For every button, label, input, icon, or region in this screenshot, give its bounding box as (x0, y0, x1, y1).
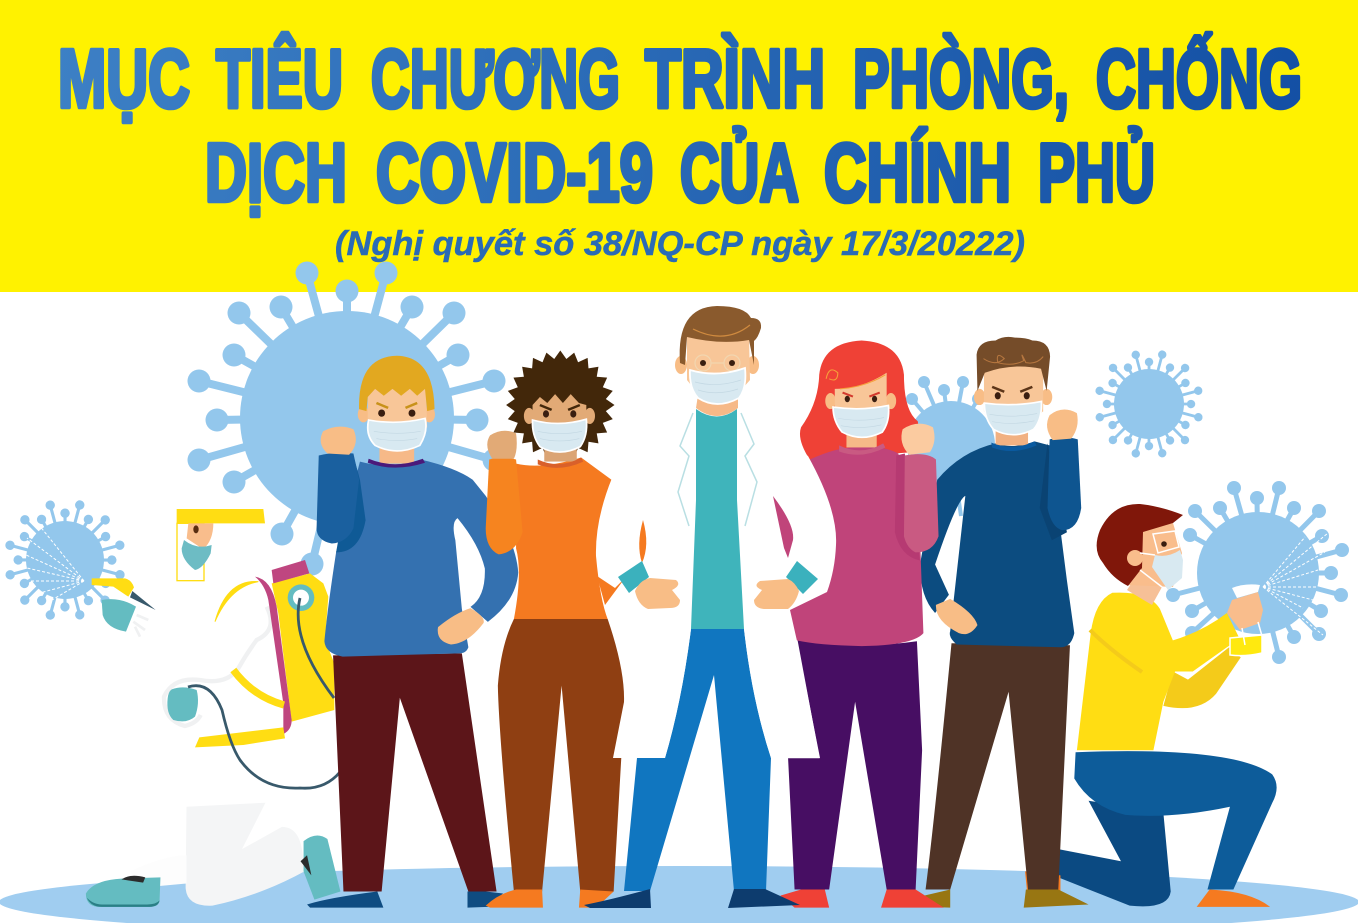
title: PHỦ (1038, 126, 1155, 219)
eye (1161, 541, 1167, 547)
front leg (1074, 751, 1277, 890)
title: CỦA (680, 126, 799, 219)
right cuff (786, 561, 818, 594)
front shoe (304, 835, 340, 900)
face (1128, 523, 1182, 587)
fist (487, 431, 517, 459)
orange sleeve sliver (639, 520, 646, 563)
person: woman in orange (486, 351, 625, 908)
right hand (754, 579, 799, 609)
backpack cap (272, 560, 309, 583)
neck (379, 445, 414, 464)
mask (984, 401, 1042, 435)
title: TIÊU (216, 32, 343, 125)
neck and collar (696, 395, 738, 416)
trousers (788, 640, 922, 890)
ear (1127, 550, 1143, 566)
small virus top right (1081, 336, 1217, 472)
person: kneeling sprayer in white suit (86, 509, 340, 907)
collar (991, 441, 1037, 451)
mask pleats (538, 431, 582, 441)
face (984, 364, 1043, 427)
title: COVID-19 (376, 126, 653, 219)
subtitle: (Nghị quyết số 38/NQ-CP ngày 17/3/20222) (335, 225, 1025, 263)
doctor mask pleats (695, 380, 741, 393)
back leg (1058, 801, 1171, 906)
raised arm (904, 454, 939, 552)
eyes (700, 360, 706, 366)
brows (992, 387, 1032, 392)
eyes (845, 396, 850, 402)
mask (1152, 550, 1183, 590)
yellow belt (195, 727, 285, 747)
ears (825, 393, 836, 409)
sweater (324, 460, 518, 657)
face (687, 335, 750, 400)
virus right with spray (1166, 481, 1349, 664)
visor (177, 509, 265, 523)
orange arm (597, 576, 625, 605)
arm shade (1040, 443, 1067, 540)
shirt (691, 409, 744, 629)
hand (1227, 592, 1263, 630)
doctor mask (690, 368, 745, 404)
mask (368, 418, 426, 451)
left hand (635, 578, 680, 609)
shoes (780, 890, 944, 908)
front shoe wedge (301, 855, 311, 875)
sweater crease (1090, 630, 1142, 672)
raised arm (1047, 437, 1081, 530)
face (533, 394, 586, 443)
lab coat left (596, 410, 691, 758)
spray gun (92, 578, 134, 597)
spray glove (102, 599, 136, 632)
raised arm (486, 458, 523, 554)
glasses (695, 355, 740, 371)
shoes (916, 890, 1089, 908)
eyes (378, 409, 385, 417)
title: DỊCH (205, 126, 347, 219)
lapels (678, 413, 757, 526)
mask pleats (374, 431, 421, 441)
glove cuff marks (133, 615, 148, 637)
ears (675, 356, 687, 374)
sweater (784, 447, 923, 646)
sprayer mask (182, 540, 212, 570)
yellow sweater (1077, 593, 1240, 750)
back arm (1163, 647, 1241, 708)
heel (1025, 871, 1060, 906)
person: doctor (584, 306, 836, 908)
bottle handle (1242, 622, 1262, 645)
hair (506, 351, 615, 460)
front shoe (1197, 890, 1270, 907)
waist hand (936, 599, 977, 634)
waist hand (438, 608, 484, 644)
sprayer eye (193, 525, 199, 533)
sweater (514, 458, 611, 619)
person: man in yellow kneeling (1025, 504, 1277, 907)
doctor shoes (584, 889, 800, 908)
sprayer face (187, 523, 213, 549)
header band (0, 0, 1358, 292)
raised arm (317, 453, 359, 544)
doctor trousers (624, 629, 771, 891)
hair (1097, 504, 1183, 586)
fist (901, 424, 935, 455)
title: PHÒNG, (853, 32, 1069, 125)
face shield frame (177, 523, 204, 581)
big virus (188, 262, 506, 576)
spray bottle head (1232, 584, 1260, 598)
trousers (498, 619, 625, 892)
doctor hair (680, 306, 761, 365)
hair (800, 340, 922, 460)
ground ellipse (0, 866, 1358, 923)
backpack strap (255, 577, 292, 734)
trousers (333, 653, 497, 892)
hair (977, 337, 1050, 391)
shoe wedge (121, 876, 145, 883)
collar (839, 443, 885, 455)
tank port (288, 584, 314, 611)
title: CHƯƠNG (371, 32, 620, 125)
ears (974, 389, 985, 405)
neck (544, 445, 577, 462)
face (835, 373, 887, 430)
title: MỤC (58, 32, 190, 125)
white suit (165, 523, 286, 750)
hose (188, 598, 340, 788)
spray bottle (1230, 635, 1262, 656)
hair line (693, 325, 750, 336)
yellow shoulder strap (233, 670, 284, 705)
eyes (995, 392, 1001, 399)
arm shade (895, 454, 920, 560)
glove (167, 687, 198, 721)
fist (1047, 410, 1078, 440)
brows (376, 403, 417, 408)
shoes (307, 892, 503, 908)
left cuff (618, 561, 649, 593)
neck (846, 429, 877, 447)
title: TRÌNH (645, 32, 825, 125)
neck (996, 427, 1028, 445)
title (58, 32, 1302, 219)
sweater (920, 441, 1074, 647)
upper suit details (92, 509, 334, 747)
sleeve fold (164, 607, 271, 726)
title: CHÍNH (824, 126, 1011, 219)
hair (359, 356, 435, 411)
ear loops and glasses (1140, 531, 1179, 587)
person: woman in magenta (780, 340, 944, 908)
collar (538, 458, 583, 468)
person: man in navy sweater (916, 337, 1089, 908)
lab coat right (744, 410, 836, 758)
backpack (272, 573, 334, 722)
hair strand (826, 370, 885, 389)
eyes (543, 410, 549, 418)
yellow strap arc (215, 582, 258, 622)
brows (843, 393, 880, 397)
hair curls (984, 355, 1043, 364)
shoe sole (87, 898, 160, 907)
spray nozzle (130, 591, 156, 610)
mask (833, 405, 889, 437)
fist (321, 427, 356, 455)
brows (540, 405, 580, 410)
trousers (926, 643, 1070, 890)
lower suit and legs (86, 803, 340, 907)
raised arm shade (336, 456, 366, 552)
shoes (486, 890, 614, 908)
collar (368, 459, 425, 468)
suit leg (186, 803, 304, 906)
virus behind man in navy (906, 376, 995, 516)
mask pleats (990, 414, 1037, 423)
ears (358, 406, 369, 422)
small virus left with spray (0, 485, 140, 635)
magenta sleeve sliver (773, 496, 793, 558)
face (368, 384, 427, 443)
mask pleats (838, 418, 884, 427)
mask (532, 419, 587, 452)
person: man in blue sweater (307, 356, 518, 908)
neck (1127, 570, 1162, 605)
suit back leg (130, 855, 186, 887)
back shoe (86, 877, 160, 907)
